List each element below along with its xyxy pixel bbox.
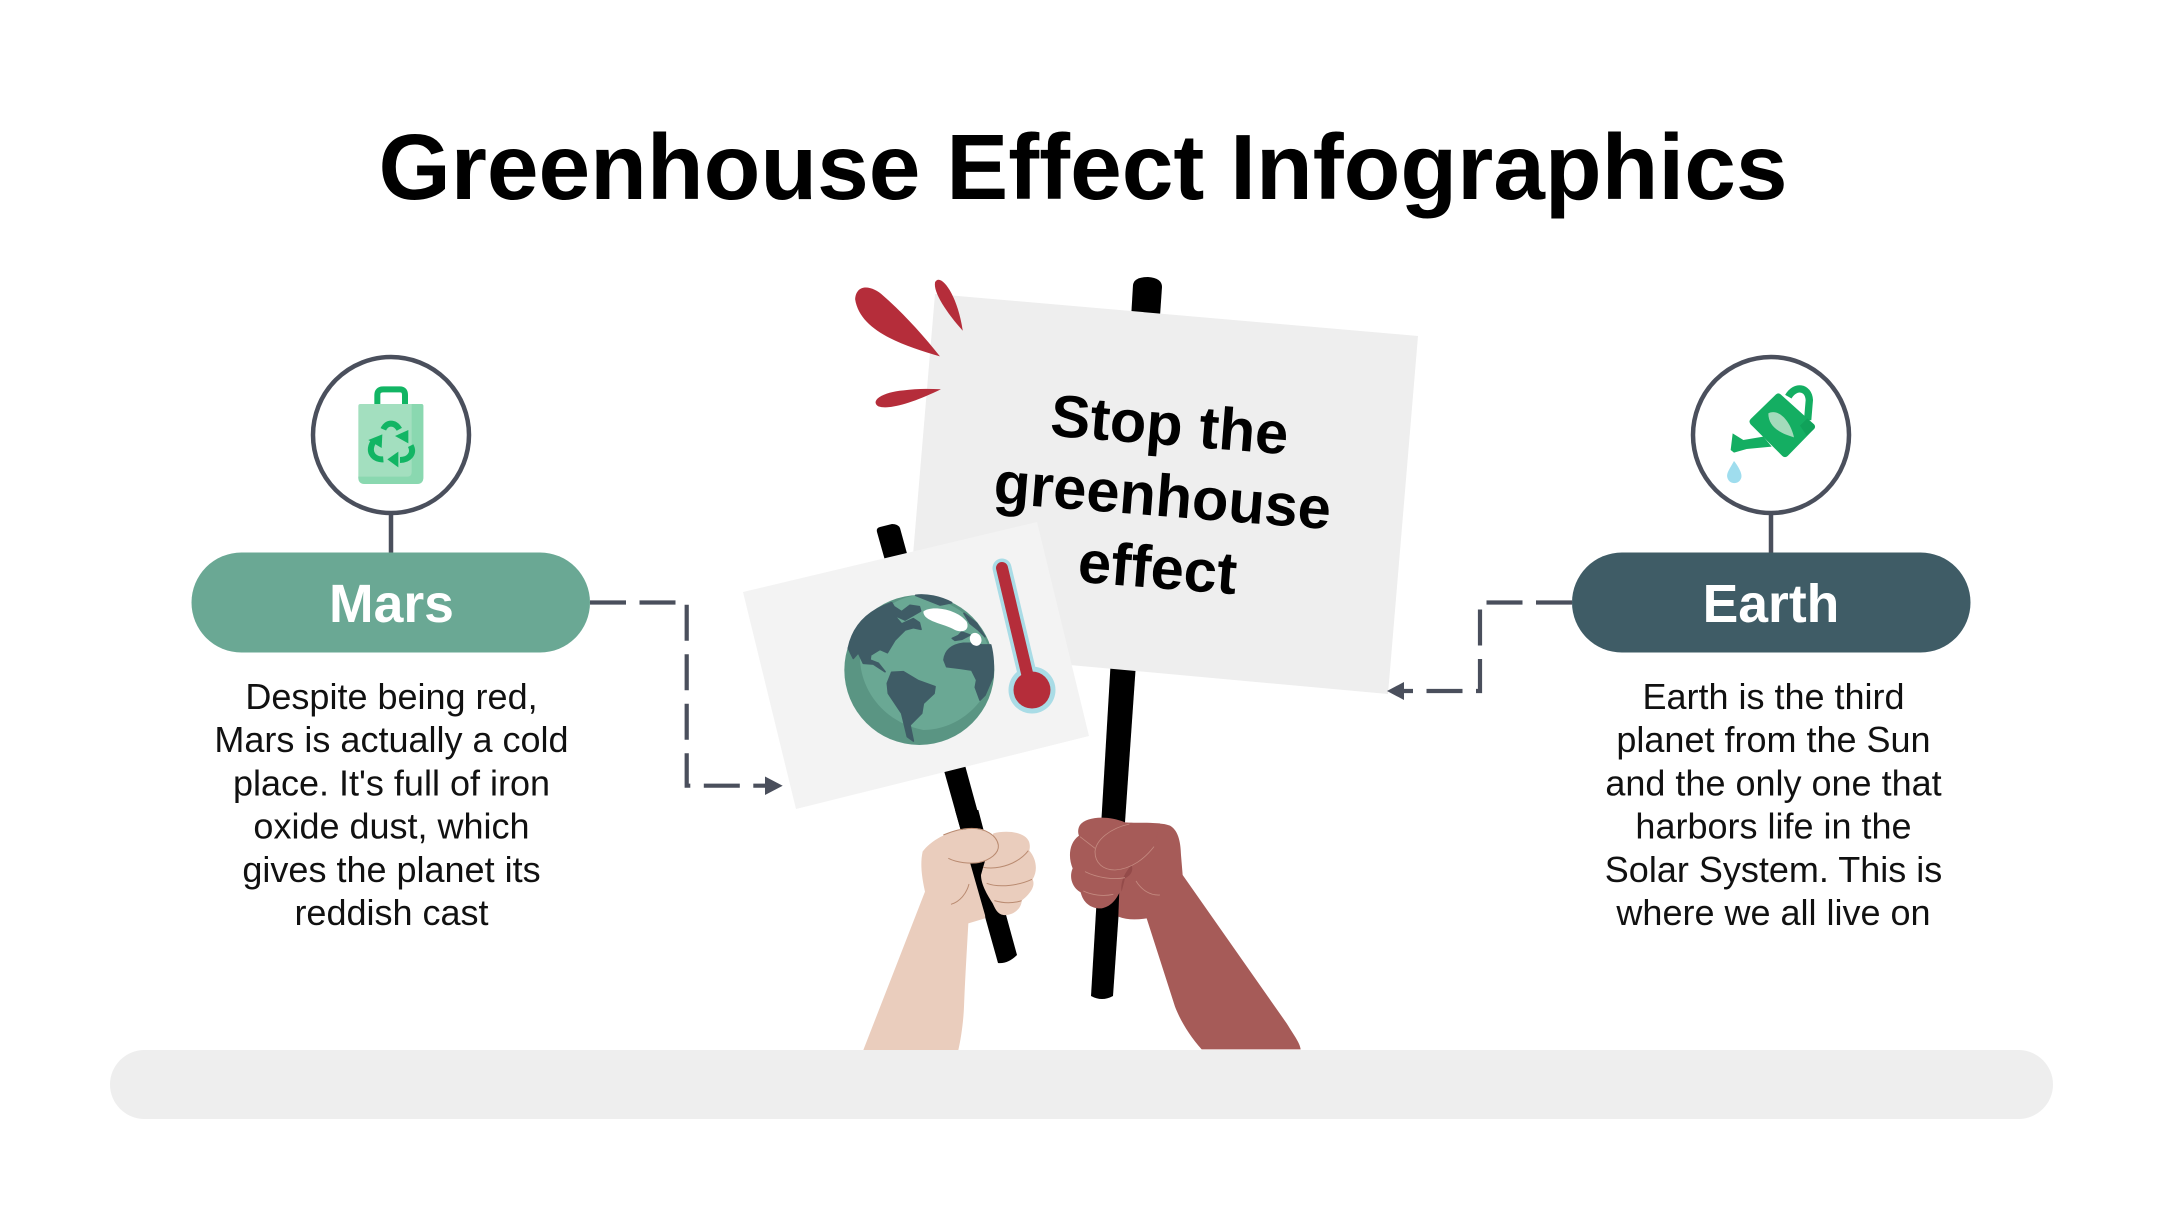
arrow: Mars to small placard [590, 602, 783, 795]
Earth description: where we all live on [1615, 892, 1931, 933]
placard slogan: effect [1076, 528, 1240, 607]
Earth heading: Earth [1703, 575, 1839, 634]
red splash marks [855, 280, 963, 407]
light-skinned hand holding small placard [863, 810, 1036, 1050]
Mars pill [192, 552, 590, 652]
icon: thermometer [1002, 568, 1056, 714]
small placard pole [877, 524, 1017, 963]
Earth description: and the only one that [1605, 762, 1942, 803]
Mars description: Despite being red, [245, 676, 538, 717]
Mars description: oxide dust, which [253, 806, 530, 847]
placard slogan: Stop the [1048, 382, 1291, 467]
Earth description: planet from the Sun [1616, 719, 1931, 760]
dark-skinned hand holding big placard [1070, 818, 1301, 1049]
placard slogan: greenhouse [992, 449, 1334, 542]
Mars connector line [389, 512, 393, 554]
big placard pole [1091, 277, 1162, 999]
icon: recycling bag [358, 389, 423, 484]
Mars description: place. It's full of iron [233, 762, 550, 803]
arrow: Earth to big placard [1387, 602, 1572, 700]
ground bar [110, 1050, 2053, 1119]
Earth pill [1572, 552, 1970, 652]
Earth icon circle [1693, 357, 1849, 513]
Earth connector line [1769, 512, 1773, 554]
title: Greenhouse Effect Infographics [378, 115, 1788, 219]
Mars description: gives the planet its [242, 849, 541, 890]
icon: watering can [1727, 389, 1815, 483]
Mars description: reddish cast [294, 892, 489, 933]
Earth description: Solar System. This is [1605, 849, 1942, 890]
small placard [743, 522, 1089, 809]
placard slogan [992, 382, 1334, 607]
Mars heading: Mars [329, 575, 454, 634]
Earth description: harbors life in the [1635, 806, 1912, 847]
Mars description: Mars is actually a cold [214, 719, 569, 760]
Mars icon circle [313, 357, 469, 513]
panel: Mars [192, 357, 590, 933]
Earth description: Earth is the third [1642, 676, 1905, 717]
big placard [905, 294, 1418, 694]
panel: Earth [1572, 357, 1970, 933]
icon: globe [844, 595, 994, 745]
